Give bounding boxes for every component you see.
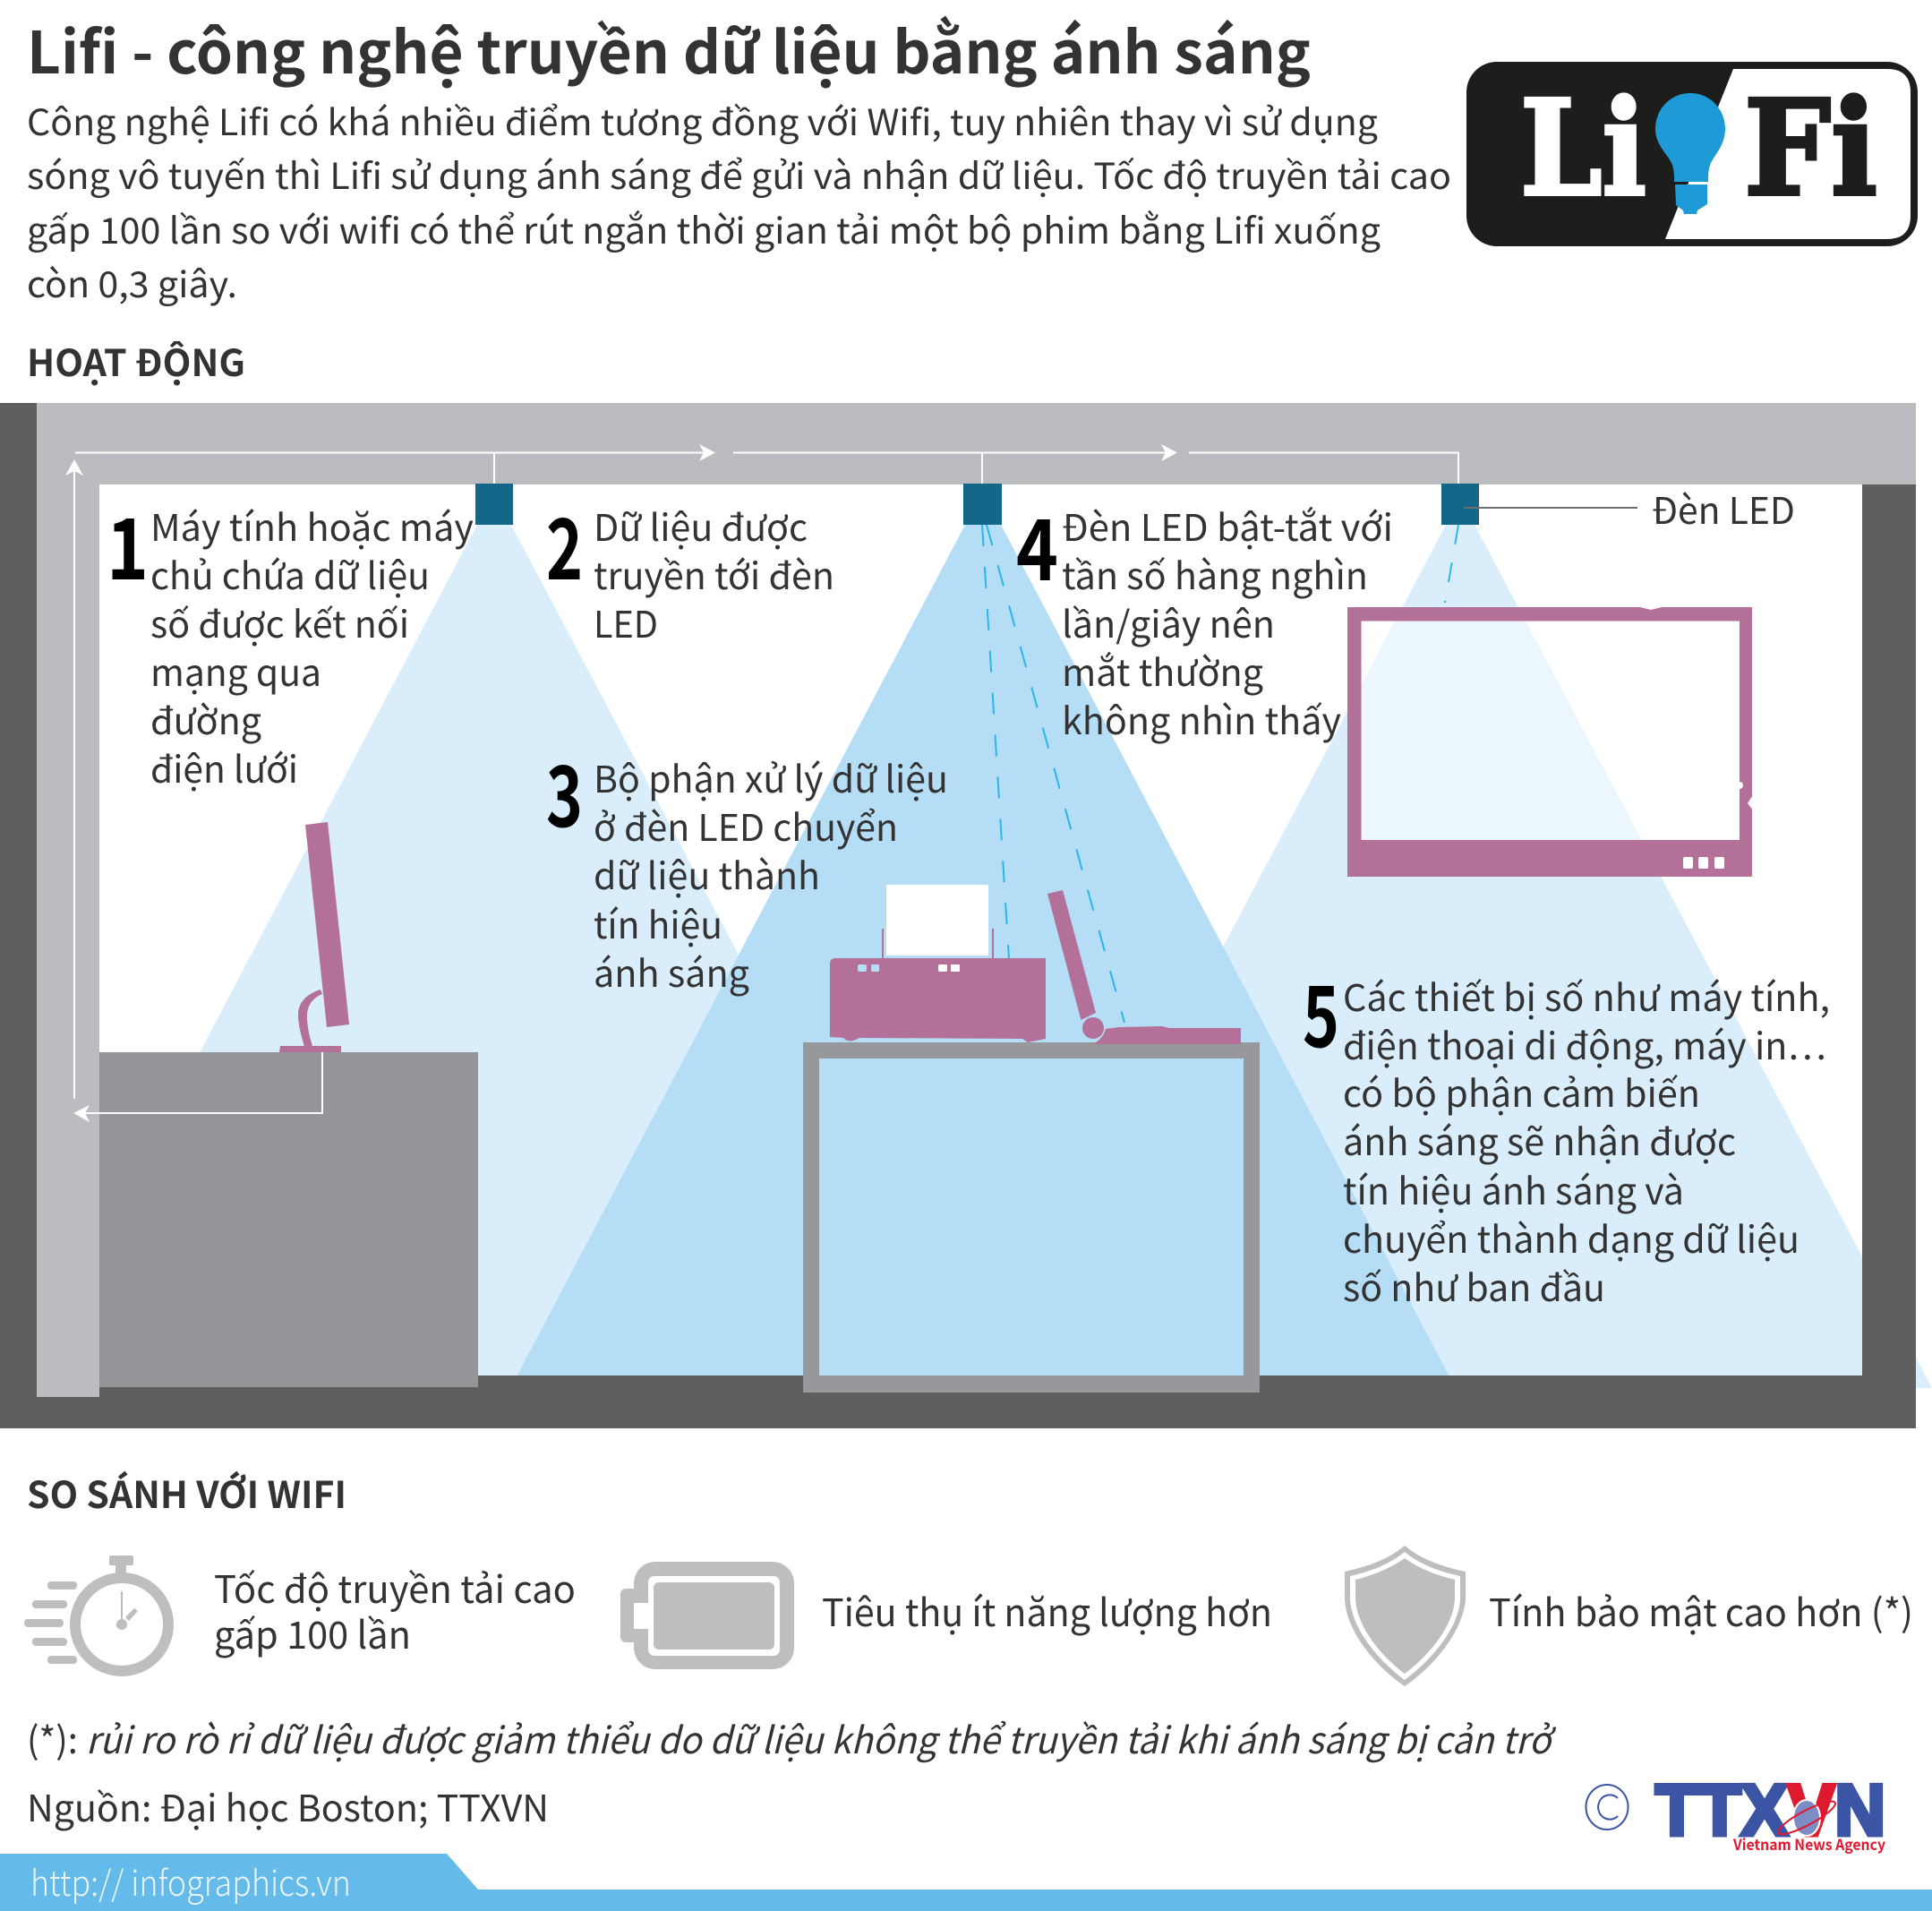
step 4: Đèn LED bật-tắt với xyxy=(1062,498,1393,552)
intro paragraph: Công nghệ Lifi có khá nhiều điểm tương đồng với Wifi, tuy nhiên thay vì sử dụng xyxy=(27,94,1378,146)
step 5: ánh sáng sẽ nhận được xyxy=(1343,1112,1736,1166)
icon: battery xyxy=(620,1562,794,1669)
step 5: số như ban đầu xyxy=(1343,1258,1605,1312)
intro paragraph: gấp 100 lần so với wifi có thể rút ngắn thời gian tải một bộ phim bằng Lifi xuống xyxy=(27,202,1381,254)
icon: television xyxy=(1347,607,1753,877)
icon: printer xyxy=(830,885,1046,1042)
arrowheads xyxy=(65,444,1177,1122)
dashed light signal lines xyxy=(982,525,1458,1023)
light cone 3 xyxy=(990,525,1932,1388)
LED lamps xyxy=(475,484,1479,525)
intro paragraph xyxy=(27,94,1451,308)
printer table xyxy=(803,1042,1260,1393)
comparison: speed: Tốc độ truyền tải cao xyxy=(214,1560,576,1615)
icon: stopwatch xyxy=(24,1555,168,1671)
heading: so sánh với wifi: SO SÁNH VỚI WIFI xyxy=(27,1465,346,1519)
icon: desktop monitor xyxy=(279,822,349,1052)
step 2: LED xyxy=(594,595,658,648)
logo: LiFi: Fi xyxy=(1744,71,1877,226)
step 3: 3 xyxy=(546,730,583,852)
icon: laptop xyxy=(1047,890,1241,1044)
step 3: ở đèn LED chuyển xyxy=(594,798,898,852)
step 3 xyxy=(546,730,948,998)
step 1: điện lưới xyxy=(150,740,298,793)
panel: room diagram xyxy=(0,403,1932,1428)
comparison: security: Tính bảo mật cao hơn (*) xyxy=(1489,1583,1913,1638)
icon: shield xyxy=(1345,1546,1466,1686)
intro paragraph: sóng vô tuyến thì Lifi sử dụng ánh sáng để gửi và nhận dữ liệu. Tốc độ truyền tải cao xyxy=(27,148,1451,200)
light cone 1 xyxy=(23,525,968,1388)
logo: TTXVN: TTXVN xyxy=(1655,1770,1885,1851)
heading: hoạt động: HOẠT ĐỘNG xyxy=(27,333,245,387)
LED label: Đèn LED xyxy=(1652,481,1795,535)
step 4: mắt thường xyxy=(1062,643,1263,697)
step 2: 2 xyxy=(546,483,583,604)
step 4: không nhìn thấy xyxy=(1062,691,1341,745)
data cable arrows xyxy=(74,453,1458,1113)
title: Lifi - công nghệ truyền dữ liệu bằng ánh sáng xyxy=(27,6,1311,90)
step 5: 5 xyxy=(1303,950,1339,1072)
footnote: (*): rủi ro rò rỉ dữ liệu được giảm thiểu do dữ liệu không thể truyền tải khi ánh sáng bị cản trở xyxy=(27,1710,1556,1764)
step 4: lần/giây nên xyxy=(1062,595,1275,648)
step 1: mạng qua xyxy=(150,643,321,697)
light cone 2 xyxy=(506,525,1460,1397)
logo: TTXVN: Vietnam News Agency xyxy=(1732,1832,1885,1855)
server desk xyxy=(99,1052,478,1387)
comparison: speed: gấp 100 lần xyxy=(214,1606,411,1660)
step 3: Bộ phận xử lý dữ liệu xyxy=(594,750,948,803)
step 4 xyxy=(1016,484,1393,745)
step 1: đường xyxy=(150,691,261,745)
step 1 xyxy=(107,483,474,793)
step 5: Các thiết bị số như máy tính, xyxy=(1343,968,1830,1022)
icon: globe xyxy=(1774,1796,1839,1839)
room walls and floor xyxy=(0,403,1916,1428)
step 5: có bộ phận cảm biến xyxy=(1343,1064,1700,1118)
source: Nguồn: Đại học Boston; TTXVN xyxy=(27,1778,549,1832)
comparison: speed xyxy=(214,1560,576,1660)
step 5: tín hiệu ánh sáng và xyxy=(1343,1161,1684,1215)
logo: LiFi: Li xyxy=(1520,71,1646,226)
step 3: ánh sáng xyxy=(594,944,749,998)
footer bar xyxy=(0,1854,1932,1911)
step 5 xyxy=(1303,950,1830,1312)
step 2: Dữ liệu được xyxy=(594,498,808,552)
LED leader line xyxy=(1464,507,1637,509)
logo: LiFi xyxy=(1466,62,1918,246)
intro paragraph: còn 0,3 giây. xyxy=(27,256,237,308)
step 1: chủ chứa dữ liệu xyxy=(150,546,430,600)
step 1: 1 xyxy=(107,483,149,604)
step 5: chuyển thành dạng dữ liệu xyxy=(1343,1210,1799,1264)
step 2: truyền tới đèn xyxy=(594,546,834,600)
step 4: 4 xyxy=(1016,484,1058,605)
step 3: tín hiệu xyxy=(594,896,722,949)
step 4: tần số hàng nghìn xyxy=(1062,546,1368,600)
step 3: dữ liệu thành xyxy=(594,846,820,900)
step 5: điện thoại di động, máy in… xyxy=(1343,1016,1826,1070)
footer url: http:// infographics.vn xyxy=(30,1856,351,1907)
icon: copyright xyxy=(1586,1785,1628,1830)
step 1: số được kết nối xyxy=(150,595,409,648)
step 2 xyxy=(546,483,834,648)
comparison: energy: Tiêu thụ ít năng lượng hơn xyxy=(822,1583,1272,1638)
icon: light bulb xyxy=(1655,93,1725,214)
step 1: Máy tính hoặc máy xyxy=(150,498,474,552)
